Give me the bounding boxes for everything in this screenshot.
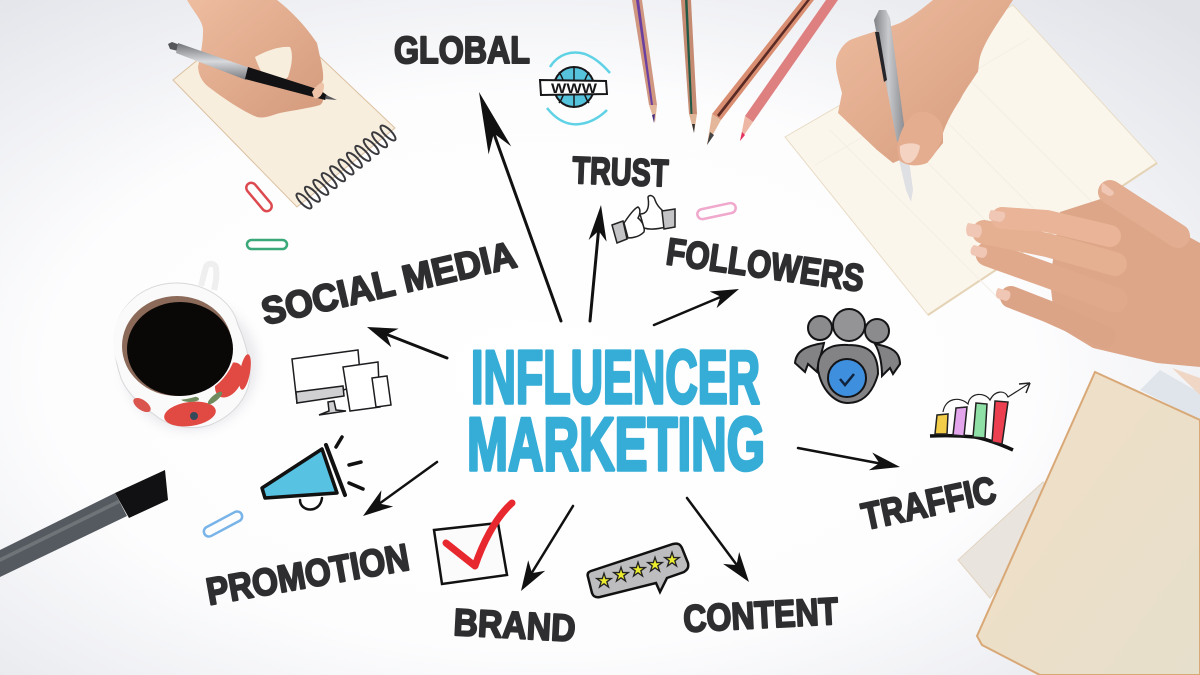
icon: star rating: ★ xyxy=(663,550,681,571)
hand: writing right xyxy=(836,0,1013,202)
label: promotion: PROMOTION xyxy=(203,537,412,614)
arrow: to content xyxy=(687,498,757,588)
icon: star rating xyxy=(588,544,688,597)
icon: red check box xyxy=(434,503,512,584)
cup flowers xyxy=(131,353,253,430)
arrow: to brand xyxy=(512,506,573,596)
pen xyxy=(874,10,913,202)
thumb xyxy=(1110,192,1178,236)
notebook: spiral pad xyxy=(173,5,398,211)
index finger xyxy=(1002,218,1110,236)
icon: pencils xyxy=(632,0,838,145)
label: trust: TRUST xyxy=(572,150,669,195)
icon: megaphone xyxy=(262,437,363,510)
icon: www globe xyxy=(540,53,610,124)
icon: green paper clip xyxy=(247,240,287,249)
icon: blue paper clip xyxy=(202,510,244,538)
label: global: GLOBAL xyxy=(394,30,530,72)
icon: star rating: ★ xyxy=(646,555,664,576)
ring finger xyxy=(988,254,1115,300)
purple pencil xyxy=(632,0,657,123)
arrow: to global xyxy=(468,88,561,321)
pink pencil xyxy=(740,0,838,141)
icon: star rating: ★ xyxy=(595,571,613,592)
icon: devices xyxy=(292,350,391,415)
title: MARKETING xyxy=(467,402,765,486)
title xyxy=(467,335,765,486)
little finger xyxy=(1011,297,1105,337)
label: brand: BRAND xyxy=(453,602,577,650)
title: INFLUENCER xyxy=(471,335,760,419)
notebooks: bottom right xyxy=(958,368,1200,675)
fingernails xyxy=(966,183,1114,301)
icon: www globe: WWW xyxy=(551,80,598,96)
icon: followers group xyxy=(795,309,900,403)
arrow: to trust xyxy=(589,204,610,321)
label: followers: FOLLOWERS xyxy=(664,231,867,301)
icon: thumbs up xyxy=(612,196,675,243)
salmon pencil xyxy=(707,0,814,145)
middle finger xyxy=(984,232,1115,264)
icon: pink paper clip xyxy=(696,202,737,220)
green pencil xyxy=(681,0,697,133)
icon: star rating: ★ xyxy=(612,565,630,586)
hand: writing left xyxy=(168,0,337,118)
arrow: to social media xyxy=(363,318,447,358)
icon: star rating: ★ xyxy=(629,560,647,581)
hand: flat right xyxy=(966,183,1200,367)
label: social media: SOCIAL MEDIA xyxy=(258,234,520,334)
arrow: to promotion xyxy=(357,462,437,524)
label: content: CONTENT xyxy=(682,591,839,641)
icon: red paper clip xyxy=(244,181,274,213)
spiral binding xyxy=(294,123,398,211)
notepad: lined paper xyxy=(785,5,1157,315)
icon: marker pen xyxy=(0,470,168,577)
arrow: to traffic xyxy=(798,448,902,476)
coffee cup xyxy=(113,264,258,431)
icon: growth chart xyxy=(930,383,1030,450)
label: traffic: TRAFFIC xyxy=(858,469,1000,539)
arrow: to followers xyxy=(654,281,742,325)
